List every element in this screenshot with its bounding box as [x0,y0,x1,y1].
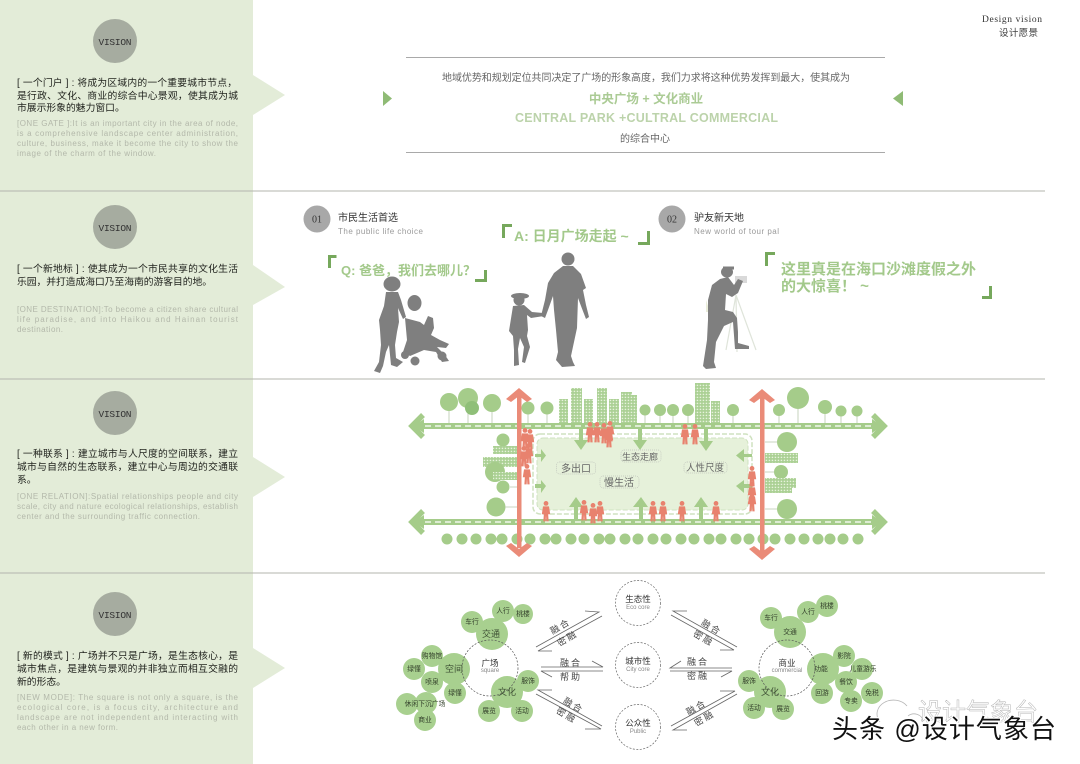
cluster: commerce bubbles: commercial [772,668,802,674]
chinese description 3 [17,447,238,486]
english description 1: culture, business, make it become the city to show the [17,139,239,148]
pointer: section 2 [253,265,285,305]
arrow: right marker [893,91,903,106]
cluster: commerce bubbles: 商业 [778,658,796,668]
quote: surprise [766,254,990,298]
english description 1: [ONE GATE ]:It is an important city in the area of node, [17,119,238,128]
core circles: 生态性 [625,594,651,604]
english description 2: destination. [17,325,63,334]
text block: one relation [17,391,238,521]
english description 3: [ONE RELATION]:Spatial relationships people and city [17,492,238,501]
arrows: left exchange: 密融 [555,628,580,648]
panel: public life choice header: 01 [312,214,322,226]
quote: surprise: 这里真是在海口沙滩度假之外 [781,260,976,278]
cluster: commerce bubbles: 专卖 [844,696,858,705]
cluster: square bubbles: 桃楼 [516,609,530,618]
pointer: section 4 [253,648,285,688]
text block: one destination [17,205,239,334]
illustration: mother with stroller [374,276,449,373]
chinese description 2 [17,262,238,288]
chinese description 4: 城市焦点，是建筑与景观的并非独立而相互交融的 [17,662,238,675]
badge: vision 4 [93,592,137,636]
panel: public life choice header: The public life choice [338,227,424,236]
chinese description 3: [ 一种联系 ] : 建立城市与人尺度的空间联系，建立 [17,447,238,460]
cluster: commerce bubbles: 免税 [865,688,879,697]
cluster: commerce bubbles: 文化 [761,686,779,697]
quote: question [330,256,486,280]
english description 3: center and the surrounding traffic connection. [17,512,200,521]
english description 2: [ONE DESTINATION]:To become a citizen share cultural [17,305,238,314]
cluster: square bubbles: 休闲下沉广场 [405,699,446,708]
panel: public life choice header: 市民生活首选 [338,211,398,224]
quote: answer: A: 日月广场走起 ~ [514,228,629,244]
arrows: left exchange [536,611,603,729]
diagram: urban connection plan [412,383,884,560]
trees and buildings: right edge [765,432,798,519]
cluster: square bubbles: 绿懂 [407,664,421,673]
cluster: commerce bubbles: 车行 [764,613,778,622]
arrows: left exchange: 融合 [561,695,586,715]
arrows: entries to park [535,429,752,519]
english description 4: ecological core, is a focus city, architecture and [17,703,238,712]
cluster: square bubbles: 商业 [418,715,432,724]
cluster: commerce bubbles: 餐饮 [839,677,853,686]
title: design vision [982,15,1042,39]
cluster: commerce bubbles: 回游 [815,688,829,697]
badge: vision 1 [93,19,137,63]
chinese description 2: 乐园，并打造成海口乃至海南的游客目的地。 [17,275,212,288]
badge: vision 3: VISION [98,409,132,420]
cluster: square bubbles: 空间 [445,663,463,674]
core circles: 城市性 [625,656,651,666]
english description 3 [17,492,238,521]
arrows: left exchange: 融合 [548,616,573,636]
statement english heading: CENTRAL PARK +CULTRAL COMMERCIAL [515,111,778,125]
chinese description 4 [17,649,238,688]
badge: vision 1: VISION [98,37,132,48]
arrows: right exchange: 融合 [687,656,709,667]
statement intro: 地域优势和规划定位共同决定了广场的形象高度，我们力求将这种优势发挥到最大，使其成为 [442,71,850,84]
chinese description 4: [ 新的模式 ] : 广场并不只是广场，是生态核心，是 [17,649,238,662]
english description 3: scale, city and nature ecological relationships, establish [17,502,238,511]
labels: park qualities: 生态走廊 [622,451,658,462]
cluster: commerce bubbles [738,595,883,720]
english description 4 [17,693,239,732]
english description 4: landscape are not independent and interacting with [17,713,238,722]
cluster: square bubbles: square [481,668,500,674]
arrows: left exchange: 帮助 [560,671,582,682]
illustration: father and child [509,252,589,367]
english description 1 [17,119,239,158]
cluster: square bubbles: 人行 [496,606,510,615]
english description 2: life paradise, and into Haikou and Hainan tourist [17,315,239,324]
arrows: right exchange: 密融 [687,670,709,681]
arrows: right exchange: 融合 [684,697,709,717]
core circles: 公众性 [625,718,651,728]
cluster: square bubbles: 活动 [515,706,529,715]
cluster: commerce bubbles: 交通 [783,627,797,636]
roads [412,415,884,533]
arrow: left marker [383,91,392,106]
cluster: square bubbles: 购物馆 [422,651,442,660]
labels: park qualities: 慢生活 [604,476,634,489]
cluster: commerce bubbles: 展览 [776,704,790,713]
cluster: square bubbles: 车行 [465,617,479,626]
chinese description 3: 城市与自然的生态联系，建立中心与周边的交通联 [17,460,238,473]
labels: park qualities: 人性尺度 [686,462,724,474]
watermark: 头条 @设计气象台 [832,714,1056,744]
chinese description 2: [ 一个新地标 ] : 使其成为一个市民共享的文化生活 [17,262,238,275]
panel: public life choice header [304,206,424,236]
cluster: square bubbles: 喷泉 [425,677,439,686]
labels: park qualities: 多出口 [561,462,591,475]
trees: top row [440,387,862,423]
cluster: square bubbles: 绿懂 [448,688,462,697]
arrows: right exchange: 密融 [691,628,716,648]
trees and buildings: left edge [483,434,518,516]
pointer: section 1 [253,75,285,115]
cluster: commerce bubbles: 影院 [837,651,851,660]
english description 4: [NEW MODE]: The square is not only a square, is the [17,693,239,702]
pointer: section 3 [253,457,285,497]
callout: central park statement [383,58,903,152]
cluster: square bubbles [396,600,539,731]
arrows: red vertical links [506,388,775,560]
panel: tour pal header: 02 [667,214,677,226]
badge: vision 2 [93,205,137,249]
cluster: commerce bubbles: 儿童游乐 [849,664,877,673]
chinese description 3: 系。 [17,474,37,486]
arrows: left exchange: 密融 [554,705,579,725]
cluster: commerce bubbles: 功能 [814,664,828,673]
title: design vision: 设计愿景 [999,27,1038,39]
text block: one gate [17,19,239,158]
cluster: square bubbles: 展览 [482,706,496,715]
panel: tour pal header [658,206,779,236]
english description 2 [17,305,239,334]
quote: answer [504,226,648,244]
arrows: left exchange: 融合 [560,657,582,668]
english description 4: each other in a new form. [17,723,118,732]
panel: tour pal header: New world of tour pal [694,227,779,236]
watermark [832,699,1056,744]
labels: park qualities [556,450,727,489]
cluster: square bubbles: 服饰 [521,676,535,685]
english description 1: is a comprehensive landscape center administration, [17,129,238,138]
badge: vision 2: VISION [98,223,132,234]
chinese description 1: [ 一个门户 ] : 将成为区域内的一个重要城市节点， [17,76,237,89]
arrows: right exchange [670,611,737,730]
people: red figures [520,421,756,523]
panel: left sidebar [0,0,285,764]
cluster: square bubbles: 交通 [482,628,500,639]
quote: question: Q: 爸爸，我们去哪儿？ [341,263,476,278]
core circles: Eco core [626,605,650,611]
trees: bottom row [442,534,864,544]
illustration: photographer with tripod [703,266,756,369]
cluster: square bubbles: 文化 [498,686,516,697]
panel: tour pal header: 驴友新天地 [694,211,744,224]
core circles: Public [630,729,646,735]
badge: vision 3 [93,391,137,435]
title: design vision: Design vision [982,15,1042,25]
watermark: 设计气象台 [918,699,1038,726]
cluster: commerce bubbles: 桃楼 [820,601,834,610]
statement ending: 的综合中心 [620,132,670,145]
diagram: square and commerce bubble network [396,580,883,750]
statement chinese heading: 中央广场 + 文化商业 [589,91,703,106]
cluster: commerce bubbles: 人行 [801,607,815,616]
english description 1: image of the charm of the window. [17,149,156,158]
cluster: commerce bubbles: 服饰 [742,676,756,685]
badge: vision 4: VISION [98,610,132,621]
arrows: right exchange: 融合 [699,617,724,637]
chinese description 1: 是行政、文化、商业的综合中心景观，使其成为城 [17,89,238,102]
text block: new mode [17,592,239,732]
chinese description 1 [17,76,238,114]
buildings: skyline [559,383,720,423]
cluster: commerce bubbles: 活动 [747,703,761,712]
quote: surprise: 的大惊喜！ ~ [781,277,869,295]
chinese description 4: 新的形态。 [17,675,66,688]
chinese description 1: 市展示形象的魅力窗口。 [17,101,125,114]
arrows: right exchange: 密融 [692,708,717,728]
cluster: square bubbles: 广场 [481,658,499,668]
park area [533,434,752,514]
core circles [616,580,660,750]
core circles: City core [626,667,650,673]
